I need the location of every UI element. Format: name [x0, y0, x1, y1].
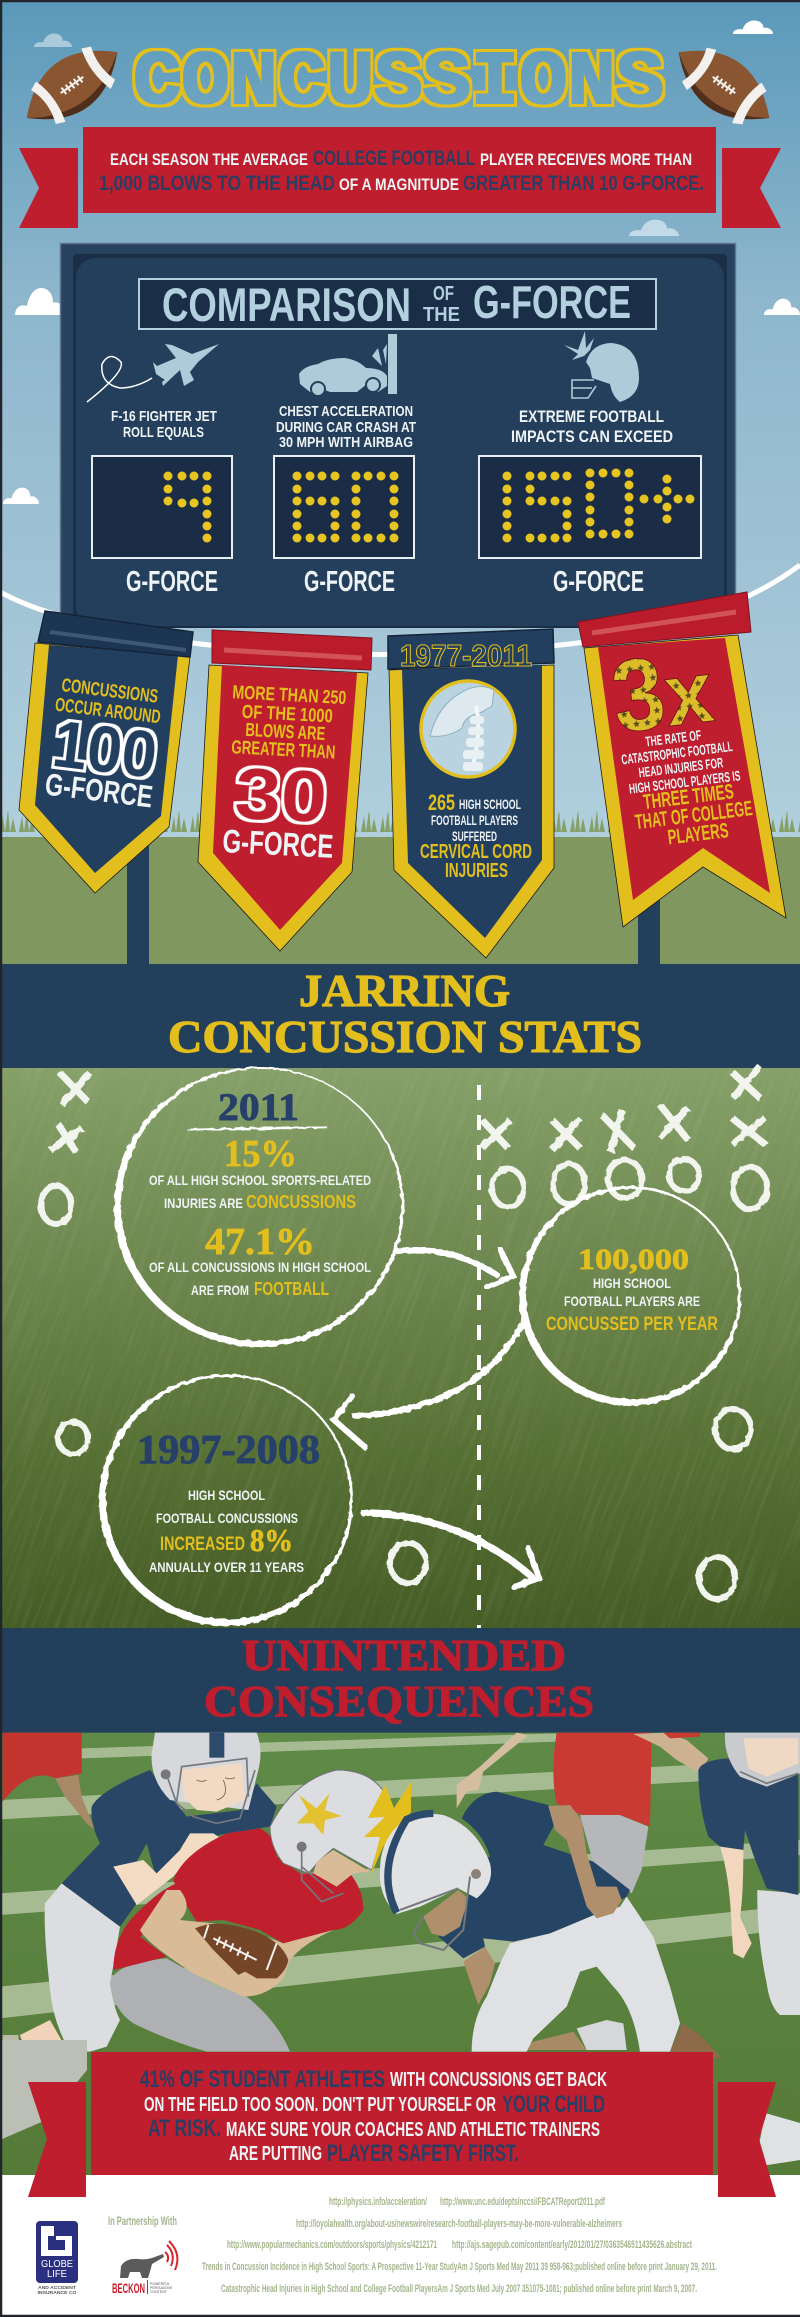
cervical text: HIGH SCHOOL — [459, 796, 521, 812]
heading band: unintended consequences — [0, 1628, 800, 1733]
ribbon text: COLLEGE FOOTBALL — [313, 147, 475, 170]
banner: 3x: 3 — [606, 635, 671, 754]
football left — [11, 30, 133, 140]
circle: 2011 stats: OF ALL HIGH SCHOOL SPORTS-RELATED — [149, 1172, 371, 1188]
heading band: jarring concussion stats: JARRING — [299, 965, 510, 1016]
scoreboard heading: G-FORCE — [473, 276, 631, 328]
score box: 150+ — [479, 456, 701, 558]
caption: football impacts: IMPACTS CAN EXCEED — [511, 427, 673, 446]
circle: 100,000: FOOTBALL PLAYERS ARE — [564, 1293, 700, 1309]
banner: 100 g-force: CONCUSSIONS — [60, 675, 159, 708]
logo: globe life — [36, 2221, 78, 2295]
circle: 1997-2008: FOOTBALL CONCUSSIONS — [156, 1510, 298, 1526]
field scratches — [2, 1070, 800, 1628]
scoreboard heading — [139, 276, 656, 331]
circle: 1997-2008: ANNUALLY OVER 11 YEARS — [149, 1559, 304, 1575]
carried football — [195, 1924, 288, 1978]
logo: globe life: GLOBE — [41, 2259, 73, 2270]
score box: 60 — [274, 456, 414, 558]
ribbon text: WITH CONCUSSIONS GET BACK — [390, 2069, 607, 2091]
circle: 1997-2008: HIGH SCHOOL — [188, 1487, 265, 1503]
background player right — [698, 1733, 800, 2015]
years: 1977-2011 — [400, 638, 532, 673]
ribbon text: PLAYER RECEIVES MORE THAN — [480, 150, 692, 169]
circle: 2011 stats: 2011 — [218, 1086, 299, 1129]
caption: car crash: CHEST ACCELERATION — [279, 403, 413, 420]
white footer — [0, 2175, 800, 2317]
grass and ground — [0, 812, 800, 967]
logo: globe life: LIFE — [47, 2269, 67, 2280]
ribbon text: PLAYER SAFETY FIRST. — [327, 2140, 519, 2167]
bottom ribbon — [28, 2052, 776, 2197]
sources: http://physics.info/acceleration/ — [329, 2196, 427, 2208]
ribbon text: GREATER THAN 10 G-FORCE. — [463, 172, 704, 195]
arrow: to field — [364, 1513, 539, 1587]
scoreboard heading: COMPARISON — [162, 278, 411, 331]
caption: football impacts — [511, 407, 673, 446]
logo: globe life: AND ACCIDENT — [38, 2285, 76, 2290]
football right — [663, 30, 785, 140]
play marks: x — [50, 1066, 766, 1152]
score box: 9 — [92, 456, 232, 558]
logo: beckon: PERSUASIVE — [150, 2286, 173, 2290]
caption: football impacts: EXTREME FOOTBALL — [519, 407, 664, 426]
circle: 100,000: HIGH SCHOOL — [593, 1275, 671, 1291]
banner: 3x: x — [659, 641, 718, 745]
clouds — [3, 21, 800, 504]
g-force labels: G-FORCE — [553, 566, 644, 598]
g-force labels: G-FORCE — [126, 566, 218, 598]
lower-left shoe — [0, 2040, 87, 2140]
tackler — [3, 1733, 277, 2058]
banner posts — [127, 820, 660, 966]
ribbon text: 1,000 BLOWS TO THE HEAD — [99, 172, 335, 195]
banner: cervical cord injuries — [388, 629, 554, 958]
panel: scoreboard — [60, 244, 736, 628]
circle: 100,000: 100,000 — [578, 1243, 689, 1276]
banner: 3x: HEAD INJURIES FOR — [638, 754, 724, 780]
banner: 30 g-force: G-FORCE — [222, 822, 334, 865]
circle: 2011 stats: OF ALL CONCUSSIONS IN HIGH SCHOOL — [149, 1259, 371, 1275]
banner: 100 g-force: 100 — [49, 706, 161, 792]
sources: http://www.popularmechanics.com/outdoors/sports/physics/4212171 — [227, 2239, 437, 2251]
icon: helmet impact — [564, 331, 639, 402]
caption: car crash — [276, 403, 416, 451]
circle: 2011 stats: CONCUSSIONS — [246, 1192, 356, 1212]
caption: F-16: F-16 FIGHTER JET — [111, 408, 217, 425]
circle: 1997-2008: INCREASED — [160, 1534, 245, 1555]
cervical text — [420, 790, 532, 882]
ribbon text: AT RISK. — [148, 2115, 221, 2142]
circle: 2011 stats — [114, 1067, 404, 1347]
icon: spine x-ray — [421, 681, 515, 777]
circle: 2011 stats: ARE FROM — [191, 1282, 249, 1298]
top ribbon — [19, 127, 781, 228]
scoreboard heading: OF — [433, 283, 454, 305]
banner: 3x — [578, 592, 786, 927]
logo: beckon: BECKON — [112, 2280, 145, 2296]
sources — [202, 2196, 717, 2295]
ribbon text: MAKE SURE YOUR COACHES AND ATHLETIC TRAINERS — [226, 2119, 600, 2141]
circle: 100,000 — [519, 1186, 741, 1406]
logo: beckon — [112, 2241, 177, 2296]
banner: 30 g-force: 30 — [233, 754, 329, 838]
banner: 30 g-force: GREATER THAN — [231, 737, 336, 764]
banner: 3x: THREE TIMES — [642, 780, 735, 814]
scoreboard heading: THE — [423, 304, 460, 326]
arrow: to 1997-2008 — [334, 1320, 525, 1448]
banner: 30 g-force: MORE THAN 250 — [232, 682, 347, 709]
heading band: jarring concussion stats — [0, 964, 800, 1068]
background player center — [457, 1733, 708, 1893]
title: CONCUSSIONS — [133, 40, 664, 126]
caption: car crash: 30 MPH WITH AIRBAG — [279, 434, 413, 451]
banner: 3x: PLAYERS — [666, 819, 730, 849]
banner: 100 g-force — [19, 611, 193, 893]
ribbon text: YOUR CHILD — [502, 2091, 605, 2118]
heading band: unintended consequences: CONSEQUENCES — [204, 1677, 594, 1726]
banner: 30 g-force: BLOWS ARE — [245, 720, 326, 745]
right player — [380, 1792, 722, 2058]
caption: F-16 — [111, 408, 217, 441]
banner: 100 g-force: G-FORCE — [43, 767, 155, 814]
background player left — [3, 1733, 95, 1830]
cervical text: FOOTBALL PLAYERS — [431, 812, 518, 828]
circle: 100,000: CONCUSSED PER YEAR — [546, 1314, 718, 1335]
arrow: to 100,000 — [398, 1249, 513, 1287]
panel: chalkboard field — [2, 1063, 800, 1628]
heading band: unintended consequences: UNINTENDED — [242, 1631, 566, 1680]
cervical text: SUFFERED — [452, 828, 497, 844]
impact burst — [364, 1782, 411, 1877]
banner: 30 g-force — [198, 630, 372, 951]
icon: fighter jet — [87, 344, 219, 402]
ribbon text: OF A MAGNITUDE — [339, 175, 459, 194]
cervical text: 265 — [428, 790, 455, 815]
illustration: football players colliding — [0, 1733, 800, 2175]
partnership label: In Partnership With — [108, 2214, 177, 2228]
g-force labels — [126, 566, 644, 598]
dashed midline — [477, 1085, 481, 1628]
caption: F-16: ROLL EQUALS — [123, 424, 204, 441]
caption: car crash: DURING CAR CRASH AT — [276, 419, 416, 436]
cervical text: CERVICAL CORD — [420, 841, 532, 863]
ball carrier — [110, 1770, 390, 2052]
circle: 1997-2008: 1997-2008 — [137, 1426, 320, 1472]
circle: 2011 stats: INJURIES ARE — [164, 1195, 243, 1211]
ribbon text — [99, 147, 704, 195]
ribbon text: ARE PUTTING — [229, 2143, 322, 2165]
cervical text: INJURIES — [445, 860, 508, 882]
logo: beckon: CONTENT — [150, 2290, 168, 2294]
g-force labels: G-FORCE — [304, 566, 395, 598]
ribbon text — [140, 2066, 607, 2167]
sources: http://www.unc.edu/depts/nccsi/FBCATReport2011.pdf — [440, 2196, 605, 2208]
background players on right — [457, 1733, 800, 2015]
circle: 2011 stats: 15% — [224, 1133, 297, 1175]
stadium arc — [0, 565, 800, 654]
ribbon text: ON THE FIELD TOO SOON. DON'T PUT YOURSELF OR — [144, 2094, 496, 2116]
banner: 3x: THE RATE OF — [644, 727, 702, 749]
circle: 2011 stats: FOOTBALL — [254, 1279, 329, 1299]
circle: 1997-2008 — [99, 1374, 353, 1626]
logo: beckon: POWERFUL — [150, 2282, 170, 2286]
lower-right glove — [755, 2113, 800, 2167]
logo: globe life: INSURANCE CO — [38, 2290, 77, 2295]
circle: 2011 stats: 47.1% — [205, 1221, 315, 1263]
heading band: jarring concussion stats: CONCUSSION STATS — [168, 1011, 642, 1062]
icon: car crash — [299, 334, 397, 396]
banner: 30 g-force: OF THE 1000 — [241, 702, 333, 727]
sky background — [0, 0, 800, 964]
ribbon text: EACH SEASON THE AVERAGE — [110, 150, 308, 169]
circle: 1997-2008: 8% — [250, 1522, 293, 1558]
banner: 100 g-force: OCCUR AROUND — [54, 695, 162, 728]
left and centre players — [3, 1733, 390, 2058]
play marks: o — [41, 1159, 767, 1599]
ribbon text: 41% OF STUDENT ATHLETES — [140, 2066, 385, 2093]
turf and yard lines — [0, 1733, 800, 2175]
